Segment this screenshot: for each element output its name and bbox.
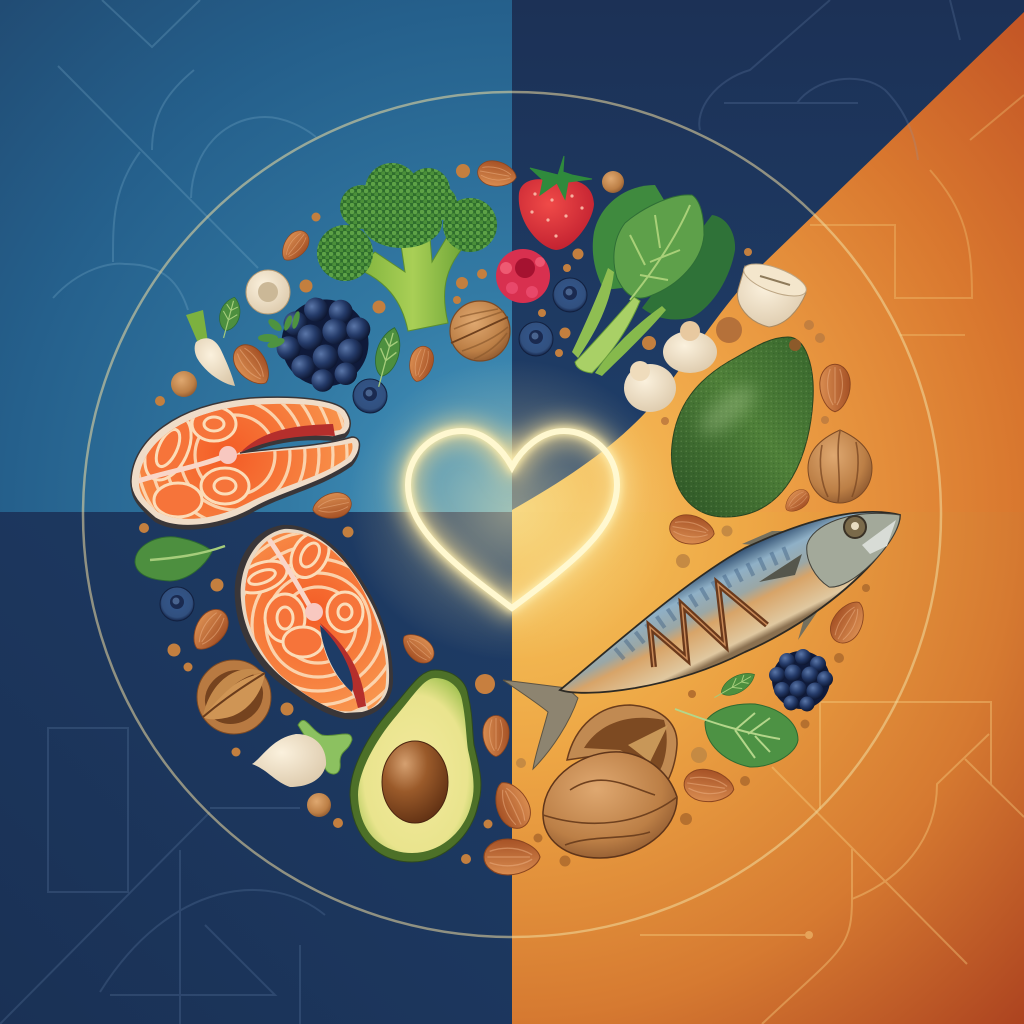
quadrant: bottom-left navy: [0, 512, 512, 1024]
mackerel fish: [503, 512, 900, 769]
left walnut: [195, 659, 273, 735]
spinach leaf right: [675, 704, 798, 767]
mushrooms: [624, 257, 810, 412]
quadrant: top-right navy: [512, 0, 1024, 512]
glowing heart: [347, 360, 677, 660]
blackberry right: [769, 649, 833, 712]
spinach leaf left: [135, 537, 225, 581]
salmon steak vertical: [234, 524, 393, 720]
broccoli: [317, 163, 497, 331]
blueberries: [160, 278, 587, 621]
garlic bulb with green top: [252, 720, 352, 787]
scattered seeds: [139, 164, 870, 866]
left leaves and herb: [214, 295, 405, 390]
spinach bunch: [572, 185, 735, 376]
blackberry left: [264, 283, 386, 404]
walnut half shell: [567, 705, 677, 780]
white radish: [186, 310, 235, 386]
right side walnut and almonds: [667, 364, 872, 805]
small hazelnuts: [171, 171, 624, 817]
small basil leaf: [710, 667, 759, 705]
left almonds: [185, 158, 540, 875]
salmon steak horizontal: [130, 396, 360, 530]
hazelnut shell: [246, 270, 290, 314]
quadrant: top-left blue: [0, 0, 512, 512]
halved avocado: [350, 670, 481, 862]
whole avocado: [671, 337, 813, 517]
quadrant: bottom-right orange: [512, 512, 1024, 1024]
walnut top centre: [450, 301, 510, 361]
thin circle frame: [83, 92, 941, 937]
strawberry: [519, 156, 594, 250]
large walnut: [543, 752, 677, 858]
raspberry: [496, 249, 550, 303]
quadrant: top-right orange wedge: [512, 12, 1024, 512]
